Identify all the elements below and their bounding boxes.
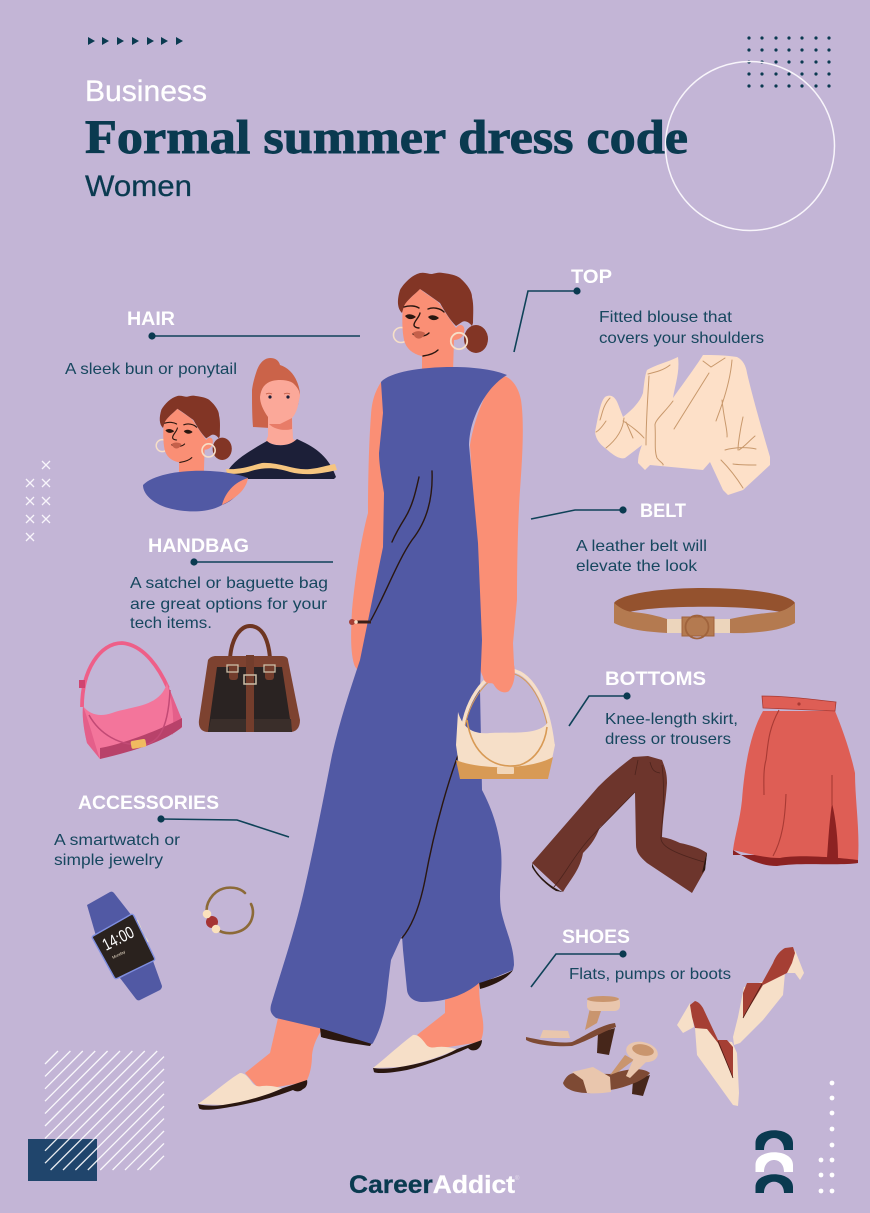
text: handbag: A satchel or baguette bag — [130, 575, 328, 592]
illustration: ponytail woman — [226, 358, 337, 479]
connector: hair — [148, 332, 360, 340]
decoration: hatched square — [45, 1051, 164, 1170]
subtitle: Women: Women — [85, 170, 192, 203]
heading: accessories: ACCESSORIES — [78, 793, 219, 814]
text: handbag: are great options for your — [130, 596, 328, 613]
facial features — [404, 306, 444, 356]
text: top: Fitted blouse that — [599, 309, 733, 326]
icon: bracelet — [203, 888, 253, 933]
text: bottoms: Knee-length skirt, — [605, 711, 738, 728]
text: shoes: Flats, pumps or boots — [569, 966, 731, 983]
text: top — [599, 309, 764, 347]
illustration: bun woman shoulders — [143, 471, 248, 511]
title block — [85, 75, 688, 203]
decoration: navy square — [28, 1139, 97, 1181]
text: belt — [576, 538, 707, 575]
heading: hair: HAIR — [127, 309, 175, 330]
text: hair: A sleek bun or ponytail — [65, 361, 237, 378]
illustration: brown satchel — [199, 626, 300, 732]
panel: bottoms — [532, 669, 858, 893]
decoration: crosses — [26, 461, 50, 541]
text: top: covers your shoulders — [599, 330, 764, 347]
connector: belt — [531, 506, 627, 519]
panel: belt — [531, 501, 795, 638]
illustration: belt — [614, 588, 795, 638]
connector: handbag — [190, 558, 333, 566]
heading: shoes: SHOES — [562, 927, 630, 948]
illustration: skirt — [733, 696, 858, 866]
illustration: sandal two — [563, 1039, 660, 1096]
text: accessories: simple jewelry — [54, 852, 163, 869]
text: belt: A leather belt will — [576, 538, 707, 555]
illustration: woman in blue dress — [198, 273, 555, 1110]
head and neck — [402, 289, 464, 372]
left earring — [394, 328, 408, 342]
heading: belt: BELT — [640, 501, 686, 522]
panel: top — [514, 267, 770, 495]
text: bottoms — [605, 711, 738, 748]
hand over bag handle — [482, 652, 515, 692]
arm left — [351, 382, 384, 670]
hair — [398, 273, 473, 326]
text: bottoms: dress or trousers — [605, 731, 731, 748]
text: belt: elevate the look — [576, 558, 698, 575]
panel: handbag — [79, 536, 333, 759]
illustration: sandal one — [526, 996, 620, 1055]
panel: accessories — [54, 793, 289, 1000]
illustration: bun woman — [156, 396, 232, 475]
text: accessories — [54, 832, 181, 869]
decoration: triangle row — [88, 37, 183, 45]
text: accessories: A smartwatch or — [54, 832, 181, 849]
heading: bottoms: BOTTOMS — [605, 669, 706, 690]
bracelet — [349, 619, 371, 625]
illustration: trousers — [532, 756, 707, 893]
illustration: pump left — [677, 1001, 739, 1106]
right earring — [451, 333, 467, 349]
dress — [271, 367, 514, 1044]
heading: top: TOP — [571, 267, 612, 288]
handbag carried — [456, 670, 555, 779]
connector: top — [514, 287, 581, 352]
illustration: pink shoulder bag — [79, 643, 182, 759]
connector: bottoms — [569, 692, 631, 726]
decoration: dot grid — [747, 36, 831, 88]
text: handbag: tech items. — [130, 615, 212, 632]
decoration: arches — [756, 1130, 793, 1193]
icon: smartwatch — [87, 892, 162, 1000]
connector: accessories — [157, 815, 289, 837]
logo: CareerAddict: CareerAddict — [349, 1171, 516, 1199]
arm right and hand — [470, 375, 523, 692]
heading: handbag: HANDBAG — [148, 536, 249, 557]
shoes — [198, 1035, 482, 1110]
illustration: blouse — [595, 355, 770, 495]
legs — [245, 983, 483, 1090]
panel: hair — [65, 309, 360, 511]
decoration: white dots — [819, 1081, 834, 1193]
connector: shoes — [531, 950, 627, 987]
decoration: white ring — [666, 62, 834, 230]
dress fold lines — [371, 471, 462, 938]
main title: Formal summer dress code — [85, 111, 688, 164]
watch date: Monday — [111, 949, 126, 960]
illustration: pump right — [733, 947, 804, 1045]
text: handbag — [130, 575, 328, 632]
subtitle: Business: Business — [85, 75, 207, 108]
panel: shoes — [526, 927, 804, 1106]
watch time: 14:00 — [99, 923, 137, 955]
dark skirt lining — [320, 970, 513, 1046]
hair bun — [464, 325, 488, 353]
logo registered mark: ® — [515, 1175, 520, 1182]
